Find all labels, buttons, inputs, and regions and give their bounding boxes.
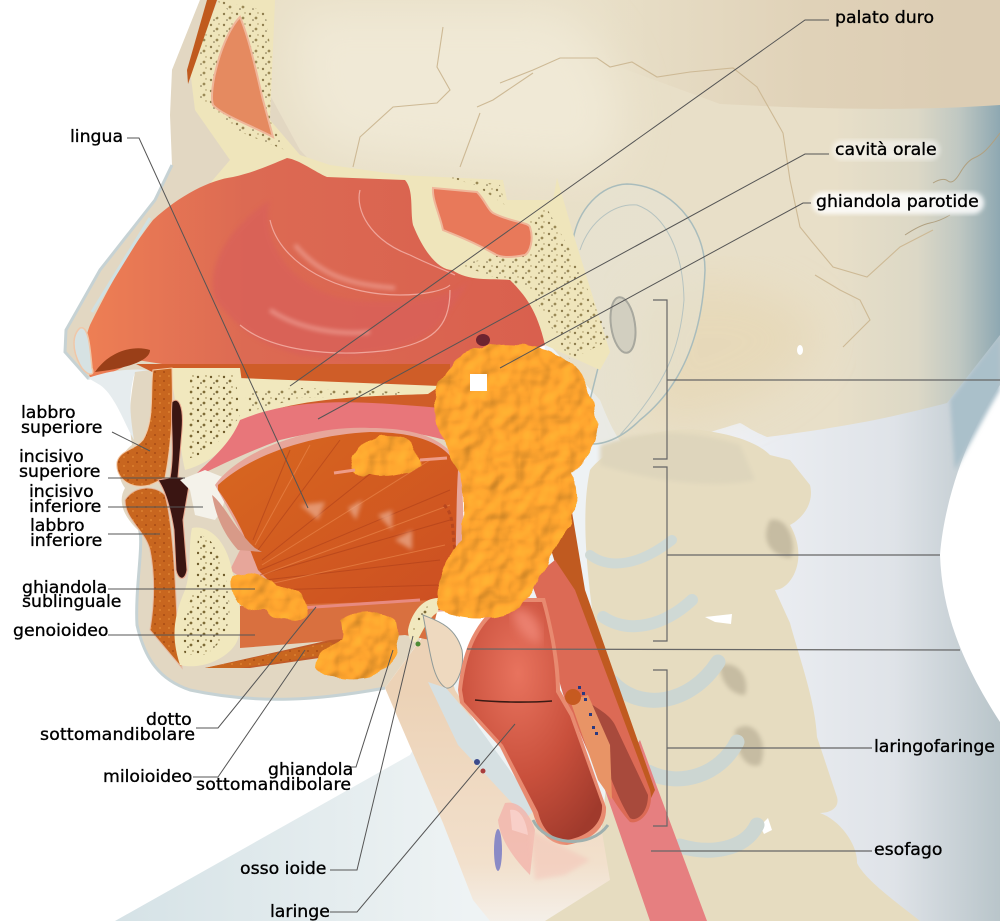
arytenoid [565, 686, 612, 800]
upper lip [117, 368, 172, 486]
label: ghiandola sublinguale: sublinguale [22, 592, 121, 612]
grey skin edge [65, 165, 385, 699]
label: laringofaringe: laringofaringe [874, 737, 995, 757]
upper jaw bone [168, 368, 245, 470]
label: ghiandola sublinguale: ghiandola [22, 578, 107, 598]
skull sutures [353, 27, 933, 347]
parotid gland [436, 344, 597, 618]
label: incisivo superiore: superiore [19, 462, 100, 482]
gum mucosa [212, 495, 262, 552]
bracket: laringofaringe [653, 670, 872, 826]
auditory tube opening [476, 334, 490, 346]
label: esofago: esofago [874, 840, 942, 860]
frontal muscle strip [187, 0, 217, 84]
label: dotto sottomandibolare: dotto [146, 710, 192, 730]
soft tissue of the face [65, 0, 470, 699]
skull wormian scribble [905, 133, 1000, 235]
leader line: incisivo inferiore [108, 506, 203, 508]
leader line: ghiandola sublinguale [108, 588, 255, 590]
vein [494, 829, 502, 871]
label: incisivo superiore: incisivo [19, 447, 84, 467]
epiglottis highlight [512, 609, 541, 645]
lower lip [125, 488, 182, 668]
sphenoid sinus [433, 188, 532, 257]
intervertebral disc 5 [680, 825, 757, 850]
floor of mouth muscle [205, 600, 440, 668]
vein dot [474, 759, 480, 765]
esophagus [605, 740, 707, 921]
tongue highlights [300, 500, 412, 550]
leader line: genoioideo [108, 634, 255, 636]
white square [470, 374, 487, 391]
tongue [215, 428, 466, 620]
label: labbro superiore: labbro [21, 403, 76, 423]
nasal turbinates [212, 200, 470, 356]
nostril hairs [95, 348, 150, 372]
small vessels [578, 686, 598, 735]
hyoid bone [408, 598, 440, 646]
leader line: osso ioide [330, 636, 413, 870]
pharynx posterior wall [530, 500, 655, 822]
palate [136, 364, 450, 420]
hyoid green dot [416, 642, 420, 646]
label: incisivo inferiore: inferiore [29, 497, 101, 517]
blue shadow behind the neck [950, 335, 1000, 470]
submandibular gland [316, 612, 397, 679]
nostril white edge [88, 369, 150, 440]
intervertebral disc 4 [648, 742, 737, 779]
leader line: esofago [651, 850, 872, 852]
label: cavità orale: cavità orale [835, 140, 937, 160]
label: genoioideo: genoioideo [13, 621, 108, 641]
label: ghiandola sottomandibolare: ghiandola [268, 760, 353, 780]
nasal cavity [74, 158, 545, 377]
label: palato duro: palato duro [835, 8, 934, 28]
warm tone above mastoid [640, 283, 820, 420]
oral cavity [190, 402, 445, 480]
bone of frontal and nasal area [95, 0, 610, 370]
mouth vestibule dark [158, 400, 190, 578]
label: ghiandola parotide: ghiandola parotide [816, 192, 979, 212]
incisors white gap [180, 470, 230, 520]
lower cartilage [533, 820, 608, 841]
label: labbro inferiore: inferiore [30, 531, 102, 551]
gland near soft palate [352, 435, 420, 477]
label: lingua: lingua [70, 127, 123, 147]
leader line: dotto sottomandibolare [196, 607, 316, 728]
intervertebral disc 1 [590, 540, 672, 563]
ear canal [607, 296, 639, 354]
lower jaw bone [175, 527, 241, 666]
vocal fold [475, 700, 552, 702]
artery dot [480, 768, 486, 774]
nasal edge [92, 218, 150, 312]
label: ghiandola sottomandibolare: sottomandibolare [196, 775, 351, 795]
label: miloioideo: miloioideo [103, 767, 192, 787]
leader line: palato duro [290, 20, 829, 386]
submandibular duct [300, 600, 420, 608]
label: labbro superiore: superiore [21, 418, 102, 438]
leader line: lingua [127, 138, 308, 508]
cartilage strip [428, 682, 537, 818]
sublingual gland [231, 574, 308, 621]
label: incisivo inferiore: incisivo [29, 482, 94, 502]
leader line: miloioideo [193, 650, 305, 777]
thyroid gland [474, 759, 535, 875]
thyroid cartilage [423, 615, 463, 688]
neck skin [115, 300, 1000, 921]
leader line: laringe [330, 724, 515, 912]
leader line: ghiandola sottomandibolare [351, 650, 393, 767]
bracket: orofaringe [653, 467, 940, 641]
leader line: ghiandola parotide [500, 203, 811, 368]
salivary duct upper [334, 458, 447, 473]
bracket: rinofaringe [653, 300, 1000, 459]
intervertebral disc 2 [603, 600, 692, 626]
pink shadow under larynx [530, 830, 590, 880]
white glow behind oral cavity label [832, 140, 940, 160]
nasal cartilage [74, 328, 93, 374]
neck soft tissue [385, 620, 610, 921]
leader line: hyoid to neck [467, 649, 960, 650]
label: osso ioide: osso ioide [240, 859, 326, 879]
label: labbro inferiore: labbro [30, 516, 85, 536]
vertebrae [495, 429, 920, 921]
intervertebral disc 3 [612, 662, 718, 700]
leader line: labbro inferiore [108, 533, 160, 535]
vertebral notches [705, 614, 772, 834]
larynx [458, 598, 606, 845]
leader line: incisivo superiore [108, 477, 185, 479]
white glow behind parotid label [812, 192, 984, 214]
ear [573, 184, 705, 444]
mastoid foramen [797, 345, 803, 355]
label: dotto sottomandibolare: sottomandibolare [40, 725, 195, 745]
leader line: labbro superiore [112, 432, 150, 451]
frontal sinus [212, 17, 273, 137]
lingual papillae [444, 505, 455, 550]
cranium [172, 0, 1000, 453]
leader line: cavità orale [318, 154, 829, 419]
tongue fibres [253, 440, 450, 590]
